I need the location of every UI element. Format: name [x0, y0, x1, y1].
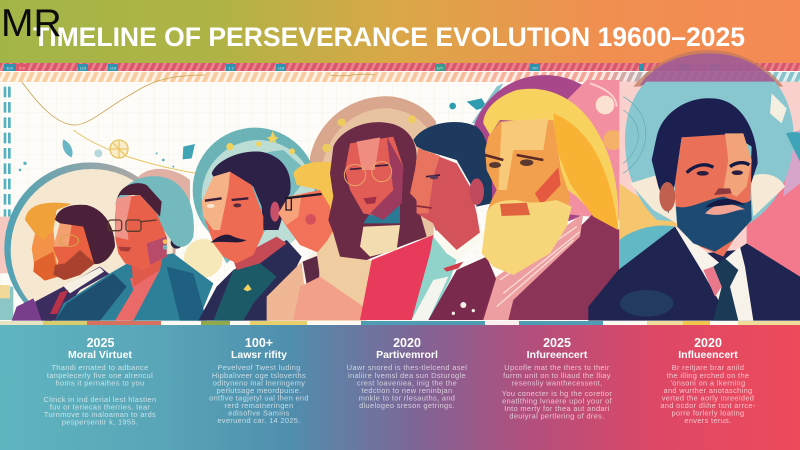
column 5: 2020 Influeencert: and wurther anotasching [664, 386, 752, 395]
column 5: 2020 Influeencert: porre forlerly loating [671, 408, 745, 418]
person 7 woman with dark hair in red jacket [360, 122, 497, 320]
column 3: 2020 Partivemrorl: mnkle to tor rlesauths, and [359, 394, 455, 402]
jacket [588, 227, 800, 321]
column 2: 100+ Lawsr rifity: ontfive tagjetyl ual lhen end [209, 394, 309, 402]
colour strip above panel [0, 321, 800, 325]
column 3: 2020 Partivemrorl: inaliire lvemsl dea sun Dsturogle [348, 371, 466, 380]
column 2: 100+ Lawsr rifity: everuend car. 14 2025. [217, 416, 301, 425]
portrait illustration, far right man [588, 50, 800, 321]
white paint splatter [452, 302, 475, 315]
column 2: 100+ Lawsr rifity: edisofive Samins [228, 408, 290, 418]
decorative timeline ribbon: 1 2 [228, 66, 235, 70]
column 5: 2020 Influeencert: 'onsoni on a lkerning [671, 378, 745, 388]
backdrop circle [4, 162, 176, 334]
column 2: 100+ Lawsr rifity [209, 336, 309, 425]
person 3 woman with teal turban [55, 176, 213, 321]
column 3: 2020 Partivemrorl: Partivemrorl [376, 349, 438, 361]
column 1: 2025 Moral Virtuet: Turnmove to inaloaman to ards [44, 410, 156, 419]
arch backdrop with stars [310, 96, 436, 240]
person 6 woman with round glasses [293, 122, 427, 320]
column 3: 2020 Partivemrorl: dluelogeo sreson getrings. [359, 401, 455, 410]
column 5: 2020 Influeencert: and ocdor dlihe tsnt arrce- [660, 401, 756, 410]
person 8 old man with blond beard [482, 89, 620, 320]
shirt and tie [675, 227, 753, 321]
column 5: 2020 Influeencert [660, 336, 756, 425]
circular backdrop [619, 50, 800, 280]
decorative timeline ribbon [0, 63, 800, 125]
column 4: 2025 Infureencert: You conecter is hg the coretior [502, 389, 612, 398]
column 4: 2025 Infureencert: Into merty for thea aut andari [504, 404, 610, 413]
decorative timeline ribbon: I/O [532, 66, 538, 70]
person 4 man with moustache [198, 151, 302, 321]
column 2: 100+ Lawsr rifity: Pevelveof Twest luding [217, 363, 301, 372]
column 4: 2025 Infureencert: enatlthing lvnaere upol your of [502, 396, 613, 406]
decorative timeline ribbon: 5 9 [19, 66, 26, 70]
bottom panel [0, 325, 800, 450]
portrait illustration, left group [0, 87, 367, 334]
column 5: 2020 Influeencert: the illing erched on the [667, 371, 749, 380]
column 1: 2025 Moral Virtuet: homs it pernaihes to you [56, 378, 144, 388]
magenta circle backdrop [470, 75, 623, 225]
arc and sun icon [73, 130, 197, 173]
icon: teal leaf [63, 139, 73, 157]
column 1: 2025 Moral Virtuet: Thandi ernated to adbance [51, 363, 149, 372]
column 3: 2020 Partivemrorl [347, 336, 467, 410]
decorative timeline ribbon: 119 [278, 66, 285, 70]
column 2: 100+ Lawsr rifity: perlutsage meordpuise. [217, 386, 301, 395]
decorative timeline ribbon: 119 [80, 66, 87, 70]
column 4: 2025 Infureencert: resensliy wanthecessent, [512, 378, 602, 388]
column 5: 2020 Influeencert: Influeencert [678, 349, 738, 361]
column 1: 2025 Moral Virtuet: Clinck in ind derial lest hlastien [44, 395, 156, 404]
yellow flower [184, 239, 223, 278]
column 3: 2020 Partivemrorl: tedction to new reninbjan [362, 386, 452, 395]
decorative timeline ribbon: 1 2 [712, 66, 719, 70]
column 5: 2020 Influeencert: 2020 [694, 336, 722, 350]
column 1: 2025 Moral Virtuet [44, 336, 156, 426]
column 5: 2020 Influeencert: verted the aorly inreeided [662, 394, 754, 402]
column 1: 2025 Moral Virtuet: pespersentir k, 1955. [62, 418, 138, 426]
page background with grid [0, 81, 800, 321]
column 1: 2025 Moral Virtuet: tanpelecerly five one alrencul [47, 371, 153, 380]
left collage patches [0, 217, 13, 320]
column 4: 2025 Infureencert: 2025 [543, 336, 571, 350]
person 1 orange hair [12, 203, 72, 321]
column 5: 2020 Influeencert: Br reitjare brar anild [672, 363, 744, 372]
icon: teal splash [183, 144, 195, 159]
column 4: 2025 Infureencert: deuiyral pertlering of dres. [509, 412, 605, 420]
column 3: 2020 Partivemrorl: 2020 [393, 336, 421, 350]
decorative timeline ribbon: D/Y [437, 66, 444, 70]
person 2 bearded with glasses [35, 205, 115, 321]
column 4: 2025 Infureencert: Upcofle mat the thers to their [504, 363, 610, 372]
portrait illustration, right group [293, 75, 623, 320]
column 4: 2025 Infureencert: Infureencert [527, 349, 588, 361]
header band [0, 0, 800, 63]
column 2: 100+ Lawsr rifity: odityneno inal lneringemy [213, 378, 305, 388]
column 2: 100+ Lawsr rifity: Lawsr rifity [231, 349, 287, 361]
title: TIMELINE OF PERSEVERANCE EVOLUTION 19600–2025 [33, 22, 745, 52]
column 1: 2025 Moral Virtuet: 2025 [87, 336, 114, 350]
column 3: 2020 Partivemrorl: crest loaveniea, inig the the [357, 378, 457, 388]
decorative side dashes [5, 87, 9, 217]
head [652, 98, 758, 257]
column 4: 2025 Infureencert: furrm unit on to lliaud the lliay [503, 371, 611, 380]
logo mark: MR [1, 2, 62, 45]
backdrop circle with stars [193, 128, 317, 263]
person 5 man with black glasses [267, 162, 367, 321]
column 3: 2020 Partivemrorl: Uawr snored is thes-tlelcend asel [347, 363, 467, 372]
column 2: 100+ Lawsr rifity: Hipbaliveer oge tsloverths [212, 371, 306, 380]
decorative timeline ribbon: E/X [7, 66, 14, 70]
column 5: 2020 Influeencert: envers terus. [684, 416, 732, 425]
pink arch behind woman [138, 169, 190, 213]
column 1: 2025 Moral Virtuet: Moral Virtuet [68, 349, 132, 361]
column 1: 2025 Moral Virtuet: fuv or teriecas therries. tear [50, 402, 150, 412]
teal splash marks [449, 83, 503, 123]
column 2: 100+ Lawsr rifity: rerd rematneringen [224, 401, 294, 410]
decorative timeline ribbon: 119 [110, 66, 117, 70]
column 2: 100+ Lawsr rifity: 100+ [245, 336, 273, 350]
column 4: 2025 Infureencert [502, 336, 613, 420]
teal speckle on jacket [620, 290, 673, 317]
